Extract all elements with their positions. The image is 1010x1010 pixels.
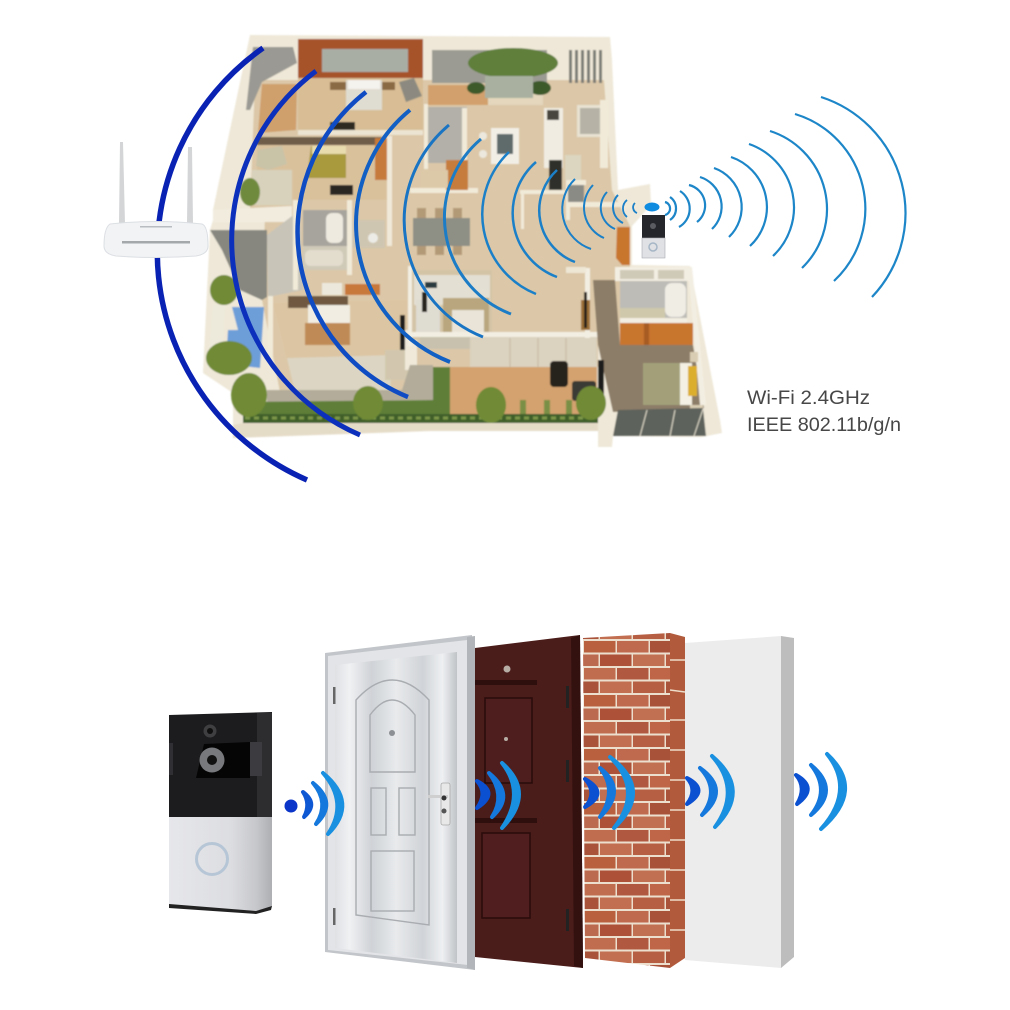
floor plan of apartment [203,35,722,447]
brick wall [583,633,685,968]
icon: blue signal dot [644,202,660,212]
brown door panels [482,698,532,918]
icon: small doorbell on plan [642,215,665,258]
icon: router [104,142,208,258]
specification text: Wi-Fi 2.4GHz [747,387,870,409]
signal icon 1 [284,773,342,834]
base ledge [233,423,598,438]
main floor [250,80,630,400]
steel door hinges [333,687,336,925]
outer walls base [203,35,722,447]
steel door frame [325,635,475,970]
pool [226,307,264,368]
patio [450,367,597,417]
dining table [413,208,470,255]
top left balcony [246,47,297,110]
router body [104,222,208,258]
signal icon 2 [477,763,519,828]
olive bed [643,363,686,405]
room right wall [585,268,590,338]
steel door leaf [335,652,457,963]
orange room [258,84,297,133]
bathroom [303,210,347,246]
bedroom 1 headboard wall [298,39,423,78]
plants [206,275,606,423]
patio grass stripes [520,400,572,416]
steel door handle [428,783,450,825]
signal icon 5 [796,754,845,829]
stripes [569,50,602,83]
steel door peephole [389,730,395,736]
kitchen [491,128,519,164]
router wifi arcs [157,48,637,480]
top garden [432,50,547,83]
plain white wall [685,636,794,968]
dining room wall [410,188,478,193]
grass strip [243,367,450,417]
wc [577,105,603,137]
bath 2 [427,107,467,163]
doorbell lens [200,748,224,772]
glass wall bottom left [287,355,392,398]
white wall left [213,206,292,222]
dark glass doors [613,408,706,436]
bedroom 3 [273,300,408,360]
brown door [475,635,583,968]
signal icon 3 [585,757,633,828]
steel door [325,635,475,970]
specification text: IEEE 802.11b/g/n [747,414,901,436]
doorbell black top [169,712,272,817]
doorbell ring button [196,844,228,874]
entrance walls [566,180,586,185]
gravel [267,365,433,402]
doorbell silver base [169,817,272,911]
living room [408,266,412,346]
router antenna right [187,147,193,224]
outward wifi arcs [665,97,905,297]
video doorbell [169,712,272,914]
doorbell camera window [196,742,250,778]
orange entrance wall [616,227,630,265]
hedge [243,414,598,423]
terrace gray [210,230,267,300]
steel door panels [356,680,429,925]
signal icon 4 [687,756,733,827]
right bathroom [615,267,690,281]
patio chairs [550,361,568,387]
router antenna left [119,142,125,224]
doorbell sensor [204,724,216,738]
right wing floor [593,280,704,412]
bedroom 2 [257,137,382,145]
brown door fittings [504,666,510,741]
